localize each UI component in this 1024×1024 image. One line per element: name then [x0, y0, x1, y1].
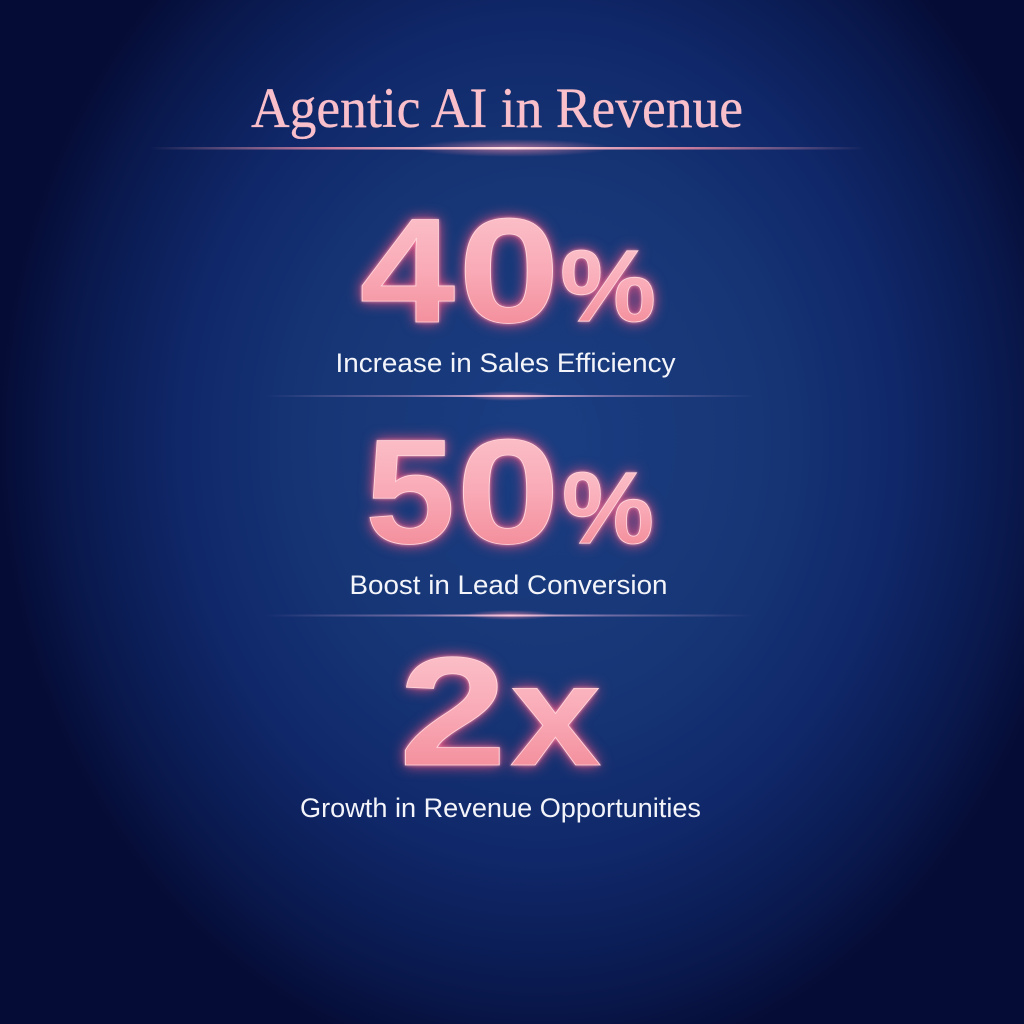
number: 50%: 5 [365, 409, 455, 576]
stat: 2x [300, 626, 701, 823]
stat: 50% [350, 408, 668, 600]
number: 50% [365, 408, 654, 576]
number: 2x: 2 [399, 626, 507, 798]
number: 40%: 0 [458, 188, 560, 354]
label: sales efficiency: Increase in Sales Efficiency [336, 348, 676, 378]
title divider [150, 139, 865, 157]
stat: 40% [336, 188, 676, 378]
divider [265, 610, 755, 620]
number: 50%: 0 [456, 408, 560, 575]
label: revenue opportunities: Growth in Revenue Opportunities [300, 793, 701, 823]
number: 50%: % [562, 451, 654, 565]
number: 2x [399, 626, 601, 798]
label: lead conversion: Boost in Lead Conversion [350, 570, 668, 600]
divider [265, 391, 755, 401]
title: Agentic AI in Revenue [251, 76, 743, 139]
number: 40%: 4 [360, 188, 455, 354]
number: 40% [360, 188, 656, 354]
number: 40%: % [560, 230, 656, 343]
number: 2x: x [510, 634, 601, 796]
